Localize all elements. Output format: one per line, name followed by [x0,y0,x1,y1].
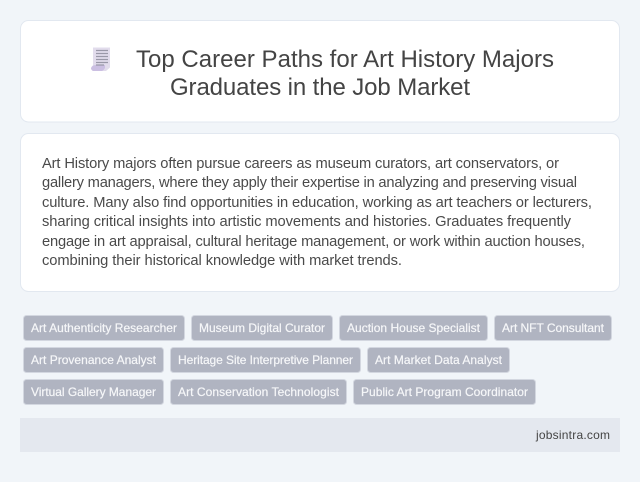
tag: Art Provenance Analyst: Art Provenance Analyst [31,353,157,367]
tag: Museum Digital Curator: Museum Digital Curator [199,321,325,335]
tag: Virtual Gallery Manager: Virtual Gallery Manager [31,385,156,399]
title [136,46,554,101]
tag: Art NFT Consultant [494,316,612,340]
text block: description: combining their historical knowledge with market trends. [42,253,402,269]
text block: description: culture. Many also find opportunities in education, working as art teachers or lecturers, [42,195,592,211]
panel: description card [20,134,620,292]
tag: Public Art Program Coordinator [354,380,536,404]
tag: Museum Digital Curator [192,316,332,340]
tag: Art Market Data Analyst: Art Market Data Analyst [375,353,503,367]
text block: description: gallery managers, where they apply their expertise in analyzing and preserving visual [42,175,577,191]
panel: header card [20,20,620,122]
tag: Art NFT Consultant: Art NFT Consultant [502,321,605,335]
tag: Heritage Site Interpretive Planner: Heritage Site Interpretive Planner [178,353,353,367]
text block: description: sharing critical insights into artistic movements and histories. Graduates frequently [42,214,572,230]
text block: description: engage in art appraisal, cultural heritage management, or work within auction houses, [42,234,585,250]
tag: Art Conservation Technologist [170,380,346,404]
tag: Public Art Program Coordinator: Public Art Program Coordinator [361,385,528,399]
tag: Art Authenticity Researcher [24,316,184,340]
text block: description: Art History majors often pursue careers as museum curators, art conservators, or [42,156,559,172]
tag: Art Conservation Technologist: Art Conservation Technologist [178,385,340,399]
title: Graduates in the Job Market [170,74,470,101]
tag: Auction House Specialist [340,316,488,340]
title: Top Career Paths for Art History Majors [136,46,554,73]
footer bar [20,418,620,452]
footer source text: jobsintra.com [535,428,610,442]
tag: Art Market Data Analyst [368,348,510,372]
text block: description [42,156,592,269]
tag: Heritage Site Interpretive Planner [170,348,360,372]
tag: Art Provenance Analyst [24,348,164,372]
tag: Art Authenticity Researcher: Art Authenticity Researcher [31,321,177,335]
tag: Virtual Gallery Manager [24,380,164,404]
icon: document scroll [91,48,110,71]
tag: Auction House Specialist: Auction House Specialist [347,321,481,335]
